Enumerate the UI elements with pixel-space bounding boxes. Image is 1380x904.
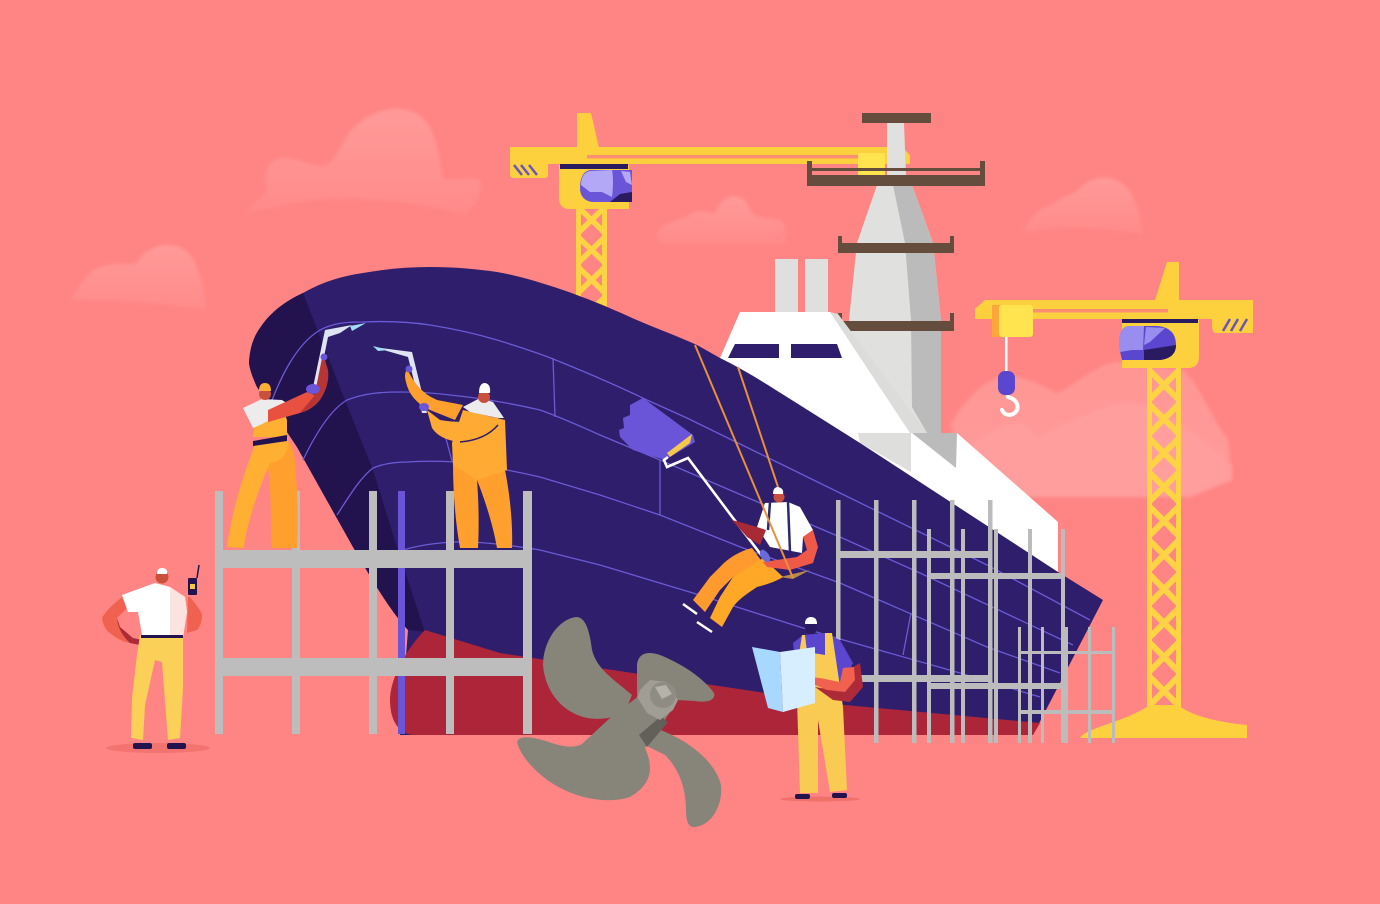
overalls — [797, 633, 847, 793]
forward arm — [427, 410, 498, 442]
hull main — [249, 267, 1103, 735]
cab window — [1119, 326, 1176, 360]
cloud: right large behind crane — [948, 362, 1232, 497]
roller — [667, 434, 692, 457]
blade bottom right — [645, 728, 721, 827]
hook block — [998, 371, 1015, 395]
warning stripes — [514, 165, 537, 175]
worker: painter on ropes — [664, 345, 818, 632]
shirt — [757, 502, 813, 553]
cable — [1005, 337, 1008, 372]
trolley — [992, 305, 1033, 337]
shirt — [122, 583, 187, 637]
mast — [1155, 262, 1179, 300]
glove shadow line — [460, 425, 498, 442]
upper arm — [268, 392, 315, 422]
horizontal rails — [838, 551, 1115, 714]
lower platform — [838, 313, 954, 331]
head — [156, 568, 168, 584]
scaffold posts — [215, 491, 532, 734]
right arm — [187, 597, 202, 633]
ship mast tower — [775, 113, 985, 433]
blade top left — [543, 617, 632, 719]
welding torch — [373, 347, 427, 413]
posts front row — [1018, 627, 1115, 743]
shirt — [793, 633, 853, 690]
hook — [1002, 397, 1018, 415]
trolley — [858, 153, 885, 176]
left arm inner — [117, 618, 147, 646]
head — [773, 487, 784, 502]
boom slot — [1033, 309, 1168, 312]
arm inner — [808, 667, 855, 692]
blade bottom left — [517, 695, 662, 800]
cloud: top left large — [247, 109, 480, 215]
worker: supervisor with radio — [102, 565, 210, 753]
ship superstructure — [720, 312, 1058, 580]
legs — [453, 463, 512, 548]
arm outer — [815, 663, 863, 702]
far leg — [693, 548, 763, 612]
flame tip — [373, 346, 388, 351]
propeller — [517, 617, 721, 827]
warning stripes — [1223, 319, 1247, 331]
upper railing platform — [807, 161, 985, 186]
right leg — [258, 437, 298, 548]
left arm — [102, 597, 147, 646]
crane boom — [510, 147, 910, 178]
mast upper — [887, 123, 906, 176]
crane cab — [559, 165, 629, 209]
near arm — [763, 530, 818, 570]
dark lower arm — [300, 353, 328, 413]
shoes — [133, 743, 186, 749]
gloves — [406, 366, 429, 411]
mast lower light — [849, 185, 941, 433]
cloud: far left — [70, 245, 205, 310]
glove — [758, 548, 772, 564]
base — [1080, 705, 1247, 738]
boom slot — [587, 155, 880, 158]
worker: engineer with plan — [752, 617, 863, 802]
worker: right welder — [373, 346, 512, 548]
cloud: top right — [1024, 178, 1142, 234]
hub cap — [637, 680, 678, 720]
ship hull — [249, 267, 1103, 735]
raised arm — [405, 370, 463, 420]
legs — [131, 635, 183, 740]
belt — [141, 635, 183, 638]
bridge window right — [791, 344, 842, 358]
cab window — [580, 170, 632, 202]
scaffold decks — [215, 550, 532, 676]
cloud: centre small — [658, 196, 785, 244]
scaffold: left — [215, 491, 532, 734]
roller handle — [664, 457, 762, 556]
shirt shading — [170, 587, 187, 637]
funnel left — [775, 259, 798, 315]
shadow — [106, 743, 210, 753]
seat — [780, 570, 810, 579]
suspenders — [768, 502, 790, 552]
funnel right — [805, 259, 828, 315]
posts middle row — [927, 529, 1065, 743]
ropes — [695, 345, 793, 578]
crane mast — [577, 113, 599, 148]
shaft — [639, 717, 668, 747]
head — [805, 617, 817, 634]
crane: right — [975, 262, 1253, 738]
hull plating lines — [272, 322, 1090, 697]
white deck house — [720, 312, 1058, 580]
lower shaded block — [912, 433, 957, 468]
shadow — [780, 796, 860, 802]
head — [478, 383, 490, 403]
lower light block — [858, 433, 911, 472]
worker: left welder — [227, 323, 366, 548]
cab — [1122, 320, 1199, 368]
crane tower — [576, 205, 607, 310]
blade top right — [637, 653, 714, 720]
scaffold: right thin — [836, 500, 1115, 743]
near leg — [710, 558, 783, 627]
left leg — [227, 437, 288, 548]
flame tip — [350, 323, 366, 331]
red keel — [390, 630, 1040, 735]
radio — [188, 565, 199, 595]
top platform — [862, 113, 931, 123]
welding torch — [312, 325, 352, 392]
mast lower shaded — [893, 185, 941, 433]
torso — [452, 410, 507, 480]
boom — [975, 300, 1253, 333]
hull shaded bow — [249, 293, 425, 632]
scaffold purple post — [398, 491, 405, 734]
back arm — [732, 520, 766, 545]
gloves — [306, 354, 328, 394]
white shoulders — [463, 398, 504, 418]
head — [259, 383, 271, 400]
tower — [1147, 368, 1181, 710]
boots — [683, 604, 712, 632]
bridge window left — [728, 344, 779, 358]
crane: left — [510, 113, 910, 310]
plan sheet — [752, 647, 815, 712]
shoes — [795, 793, 847, 799]
posts back row — [836, 500, 992, 743]
white shirt — [243, 399, 300, 428]
side strip — [830, 312, 927, 433]
middle platform — [838, 236, 954, 253]
belt — [253, 435, 287, 446]
paint patch — [619, 398, 695, 460]
torso overalls — [253, 402, 287, 437]
